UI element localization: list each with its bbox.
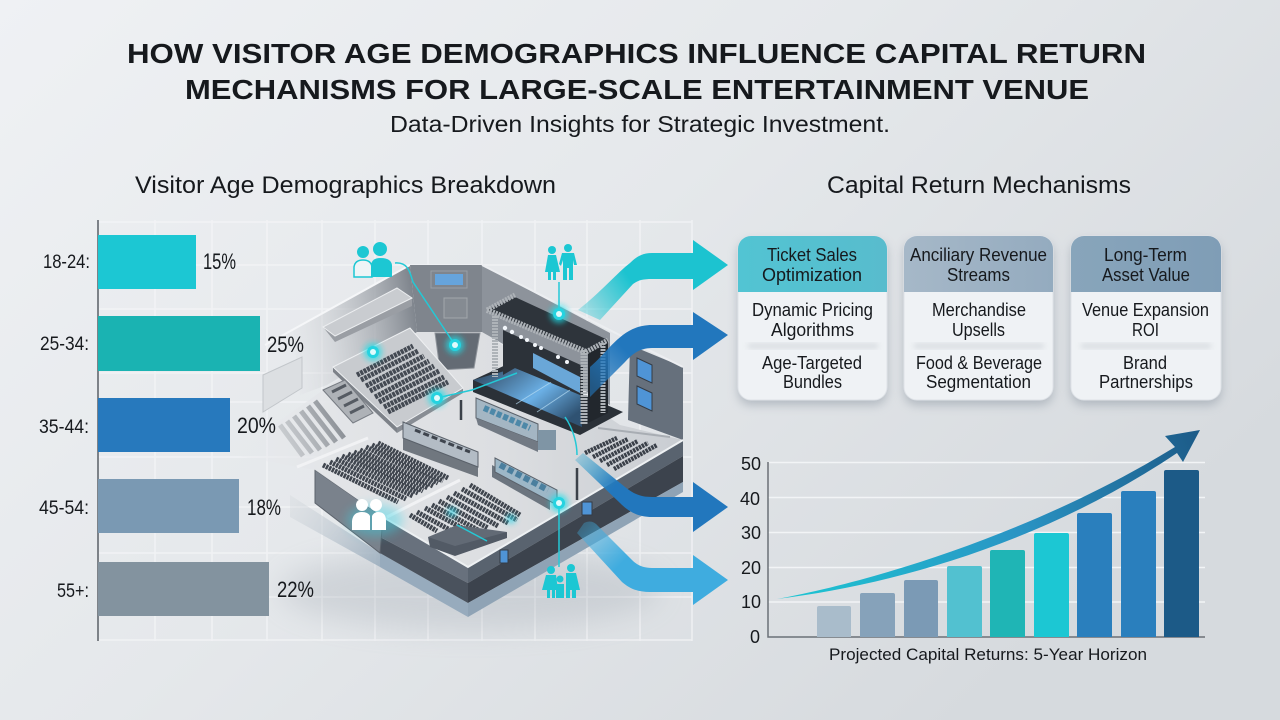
panel: ancillary revenue streams: Streams	[947, 265, 1010, 285]
side windows	[500, 358, 652, 563]
panel: long-term asset value	[1071, 236, 1221, 405]
canopy	[323, 288, 412, 342]
chart bars	[817, 470, 1199, 637]
bar: 55+: 22%	[277, 577, 314, 602]
icon: two visitors white	[347, 499, 403, 536]
panel: long-term asset value: Venue Expansion	[1082, 300, 1209, 320]
bar: 18-24: 15%	[203, 249, 236, 274]
right seating block	[585, 428, 670, 469]
bar: 25-34: 25%	[267, 332, 304, 357]
panel: ancillary revenue streams: Anciliary Revenue	[910, 245, 1047, 265]
lower-centre platform	[428, 525, 507, 556]
panel: ticket sales optimization	[738, 236, 887, 405]
bar: 25-34	[40, 316, 304, 371]
panel: ancillary revenue streams: Food & Beverage	[916, 353, 1042, 373]
upper seating block	[333, 328, 463, 433]
bar: 35-44: 35-44:	[39, 417, 89, 438]
bar: 35-44	[39, 398, 276, 452]
wall screen	[431, 271, 467, 318]
flow arrow: teal to ticket sales	[578, 240, 728, 320]
lower-centre seating block	[410, 485, 520, 531]
panel: ticket sales optimization: Ticket Sales	[767, 245, 857, 265]
bar: 45-54	[39, 479, 281, 533]
kiosk: right	[492, 458, 557, 510]
node: stage truss	[550, 305, 568, 323]
panel: ancillary revenue streams: Upsells	[952, 320, 1005, 340]
bar: 18-24	[43, 235, 236, 289]
y-axis tick labels: 10	[741, 592, 761, 612]
panel: ticket sales optimization: Algorithms	[771, 320, 854, 340]
panel: long-term asset value: Asset Value	[1102, 265, 1190, 285]
node: upper left	[364, 343, 382, 361]
bar: 18-24: 18-24:	[43, 252, 90, 273]
node: lower right	[550, 494, 568, 512]
heading: capital return mechanisms: Capital Return Mechanisms	[827, 172, 1131, 199]
panel: ancillary revenue streams	[904, 236, 1053, 405]
subtitle: Data-Driven Insights for Strategic Investment.	[390, 111, 890, 137]
panel: ancillary revenue streams: Merchandise	[932, 300, 1026, 320]
fin aisle strip	[297, 438, 368, 467]
lower aisle strip	[387, 480, 460, 517]
panel: long-term asset value: ROI	[1132, 320, 1159, 340]
heading: demographics: Visitor Age Demographics Breakdown	[135, 172, 556, 199]
flow arrow: blue to ancillary revenue	[590, 312, 728, 397]
faded left seating fins	[280, 401, 344, 456]
panel: long-term asset value: Partnerships	[1099, 372, 1193, 392]
panel: ticket sales optimization: Optimization	[762, 265, 862, 285]
kiosk: left	[403, 422, 478, 477]
venue base and outer walls	[232, 265, 683, 617]
node: centre	[428, 389, 446, 407]
panel: ticket sales optimization: Bundles	[783, 372, 842, 392]
title: MECHANISMS FOR LARGE-SCALE ENTERTAINMENT VENUE	[185, 74, 1089, 105]
left pale wall panel	[263, 357, 302, 412]
bar: 35-44: 20%	[237, 413, 276, 438]
flow arrow: blue to asset value	[575, 453, 728, 532]
stage platform	[473, 363, 623, 435]
icon: family	[542, 564, 580, 598]
truss	[487, 295, 608, 424]
panel: long-term asset value: Brand	[1123, 353, 1167, 373]
stage backdrop	[487, 297, 608, 423]
panel: ancillary revenue streams: Segmentation	[926, 372, 1031, 392]
y-axis tick labels: 50	[741, 454, 761, 474]
panel: ticket sales optimization: Age-Targeted	[762, 353, 862, 373]
bar chart: age demographics	[39, 220, 314, 641]
kiosk: centre	[476, 398, 556, 452]
bar: 45-54: 45-54:	[39, 498, 89, 519]
y-axis tick labels: 30	[741, 523, 761, 543]
icon: two visitors outlined	[354, 242, 392, 277]
growth arrow	[777, 430, 1200, 599]
panel: ticket sales optimization: Dynamic Pricing	[752, 300, 873, 320]
entrance booth	[435, 333, 480, 370]
seat glow spots	[447, 507, 516, 524]
bar: 25-34: 25-34:	[40, 334, 89, 355]
bar: 45-54: 18%	[247, 495, 281, 520]
node: entrance	[446, 336, 464, 354]
bar: 55+: 55+:	[57, 581, 89, 602]
y-axis tick labels: 0	[750, 627, 760, 647]
title: HOW VISITOR AGE DEMOGRAPHICS INFLUENCE CAPITAL RETURN	[127, 38, 1146, 69]
y-axis tick labels: 20	[741, 558, 761, 578]
bar: 55+	[57, 562, 314, 616]
flow arrow: light blue to chart	[577, 522, 728, 605]
lower-left seating block	[323, 443, 448, 502]
side stairs	[323, 380, 373, 423]
title	[127, 38, 1146, 105]
stage lights	[503, 326, 569, 364]
connector lines	[395, 263, 577, 567]
y-axis tick labels	[740, 454, 761, 647]
panel: long-term asset value: Long-Term	[1104, 245, 1187, 265]
icon: couple	[545, 244, 577, 280]
chart axes	[768, 462, 1205, 637]
illustration: isometric venue	[232, 242, 683, 630]
chart: projected capital returns	[740, 430, 1205, 664]
y-axis tick labels: 40	[740, 489, 760, 509]
floor pole	[461, 400, 577, 500]
chart caption: Projected Capital Returns: 5-Year Horizon	[829, 645, 1147, 664]
